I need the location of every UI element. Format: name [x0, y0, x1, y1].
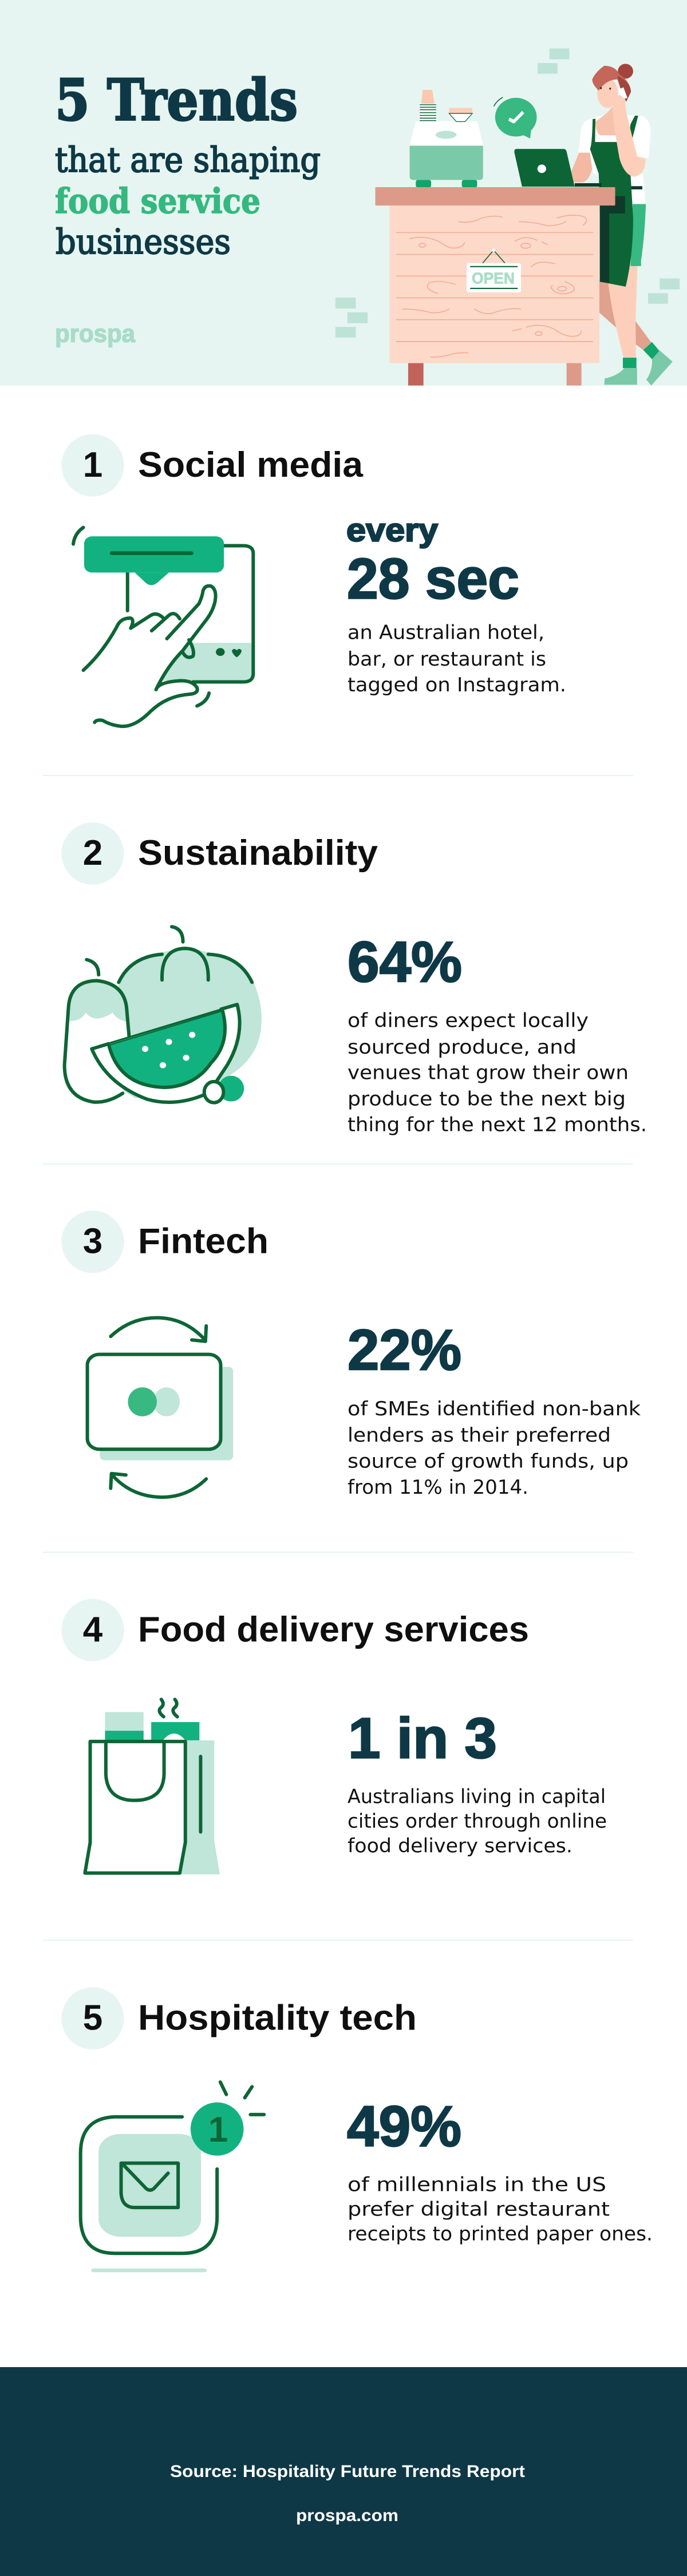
icon: takeaway bag with steam [85, 1699, 220, 1874]
panel: 3 fintech [62, 1210, 641, 1499]
icon: app notification with envelope [81, 2082, 264, 2272]
icon: payment card with exchange arrows [88, 1317, 233, 1497]
icon: pumpkin, gourd and watermelon [65, 927, 262, 1103]
heading: food delivery services: Food delivery services [138, 1610, 529, 1649]
body text: produce to be the next big [348, 1087, 626, 1110]
body text: lenders as their preferred [348, 1424, 611, 1447]
source line: Source: Hospitality Future Trends Report [170, 2462, 525, 2481]
body text: bar, or restaurant is [348, 648, 546, 671]
body text [348, 2174, 653, 2246]
body text: thing for the next 12 months. [348, 1114, 647, 1137]
subtitle line: that are shaping: that are shaping [55, 140, 321, 180]
stat: 64%: 64% [348, 930, 462, 994]
body text: of diners expect locally [348, 1010, 589, 1032]
body text: from 11% in 2014. [348, 1476, 528, 1499]
body text [348, 1398, 641, 1499]
body text: source of growth funds, up [348, 1450, 629, 1473]
open sign [467, 248, 521, 292]
icon: check speech bubble [494, 97, 537, 139]
coffee machine [410, 90, 483, 187]
number badge 2 [62, 822, 124, 885]
panel: 4 food delivery services [62, 1599, 607, 1874]
body text: tagged on Instagram. [348, 674, 566, 697]
number badge 4 [62, 1599, 124, 1661]
barista figure [571, 64, 673, 386]
heading: fintech: Fintech [138, 1221, 269, 1261]
stat: every 28 sec [346, 512, 519, 611]
body text: sourced produce, and [348, 1036, 577, 1059]
title: 5 Trends: 5 Trends [55, 68, 298, 134]
stat: 1 in 3: 1 in 3 [348, 1706, 497, 1770]
number badge 1 [62, 434, 124, 497]
body text: receipts to printed paper ones. [348, 2223, 653, 2246]
heading: sustainability: Sustainability [138, 833, 378, 873]
body text [348, 1786, 607, 1857]
stat: every 28 sec: every [346, 512, 438, 549]
body text [348, 1010, 647, 1137]
number badge 1: 1 [83, 445, 102, 485]
icon: hand tapping phone [73, 528, 253, 726]
body text: an Australian hotel, [348, 622, 544, 644]
panel: header [0, 0, 687, 386]
number badge 5: 5 [83, 1999, 102, 2037]
panel: 1 social media [62, 434, 566, 726]
body text: cities order through online [348, 1810, 607, 1833]
wooden counter [375, 187, 615, 386]
body text [348, 622, 566, 697]
sign text: OPEN: OPEN [472, 269, 515, 287]
number badge 3 [62, 1210, 124, 1273]
body text: prefer digital restaurant [348, 2198, 610, 2221]
body text: of SMEs identified non-bank [348, 1398, 641, 1420]
number badge 5 [62, 1987, 124, 2049]
number badge 2: 2 [83, 833, 102, 873]
panel: 5 hospitality tech [62, 1987, 653, 2272]
body text: food delivery services. [348, 1834, 572, 1857]
panel: footer [0, 2367, 687, 2576]
number badge 3: 3 [83, 1221, 102, 1261]
body text: of millennials in the US [348, 2174, 606, 2197]
panel: 2 sustainability [62, 822, 647, 1137]
illustration: cafe counter with barista [335, 49, 680, 386]
stat: 22%: 22% [348, 1318, 461, 1382]
number badge 4: 4 [83, 1610, 103, 1649]
heading: hospitality tech: Hospitality tech [138, 1999, 417, 2037]
notification count: 1 [208, 2110, 228, 2150]
website: prospa.com [296, 2506, 398, 2525]
body text: venues that grow their own [348, 1062, 629, 1085]
subtitle line: businesses: businesses [56, 222, 231, 262]
body text: Australians living in capital [348, 1786, 606, 1809]
stat: 49%: 49% [347, 2094, 461, 2158]
laptop [514, 149, 601, 187]
logo: prospa: prospa [55, 319, 135, 348]
heading: social media: Social media [138, 445, 364, 485]
decorative bricks [335, 49, 680, 338]
stat: every 28 sec: 28 sec [347, 547, 519, 611]
subtitle highlight: food service: food service [55, 181, 260, 221]
